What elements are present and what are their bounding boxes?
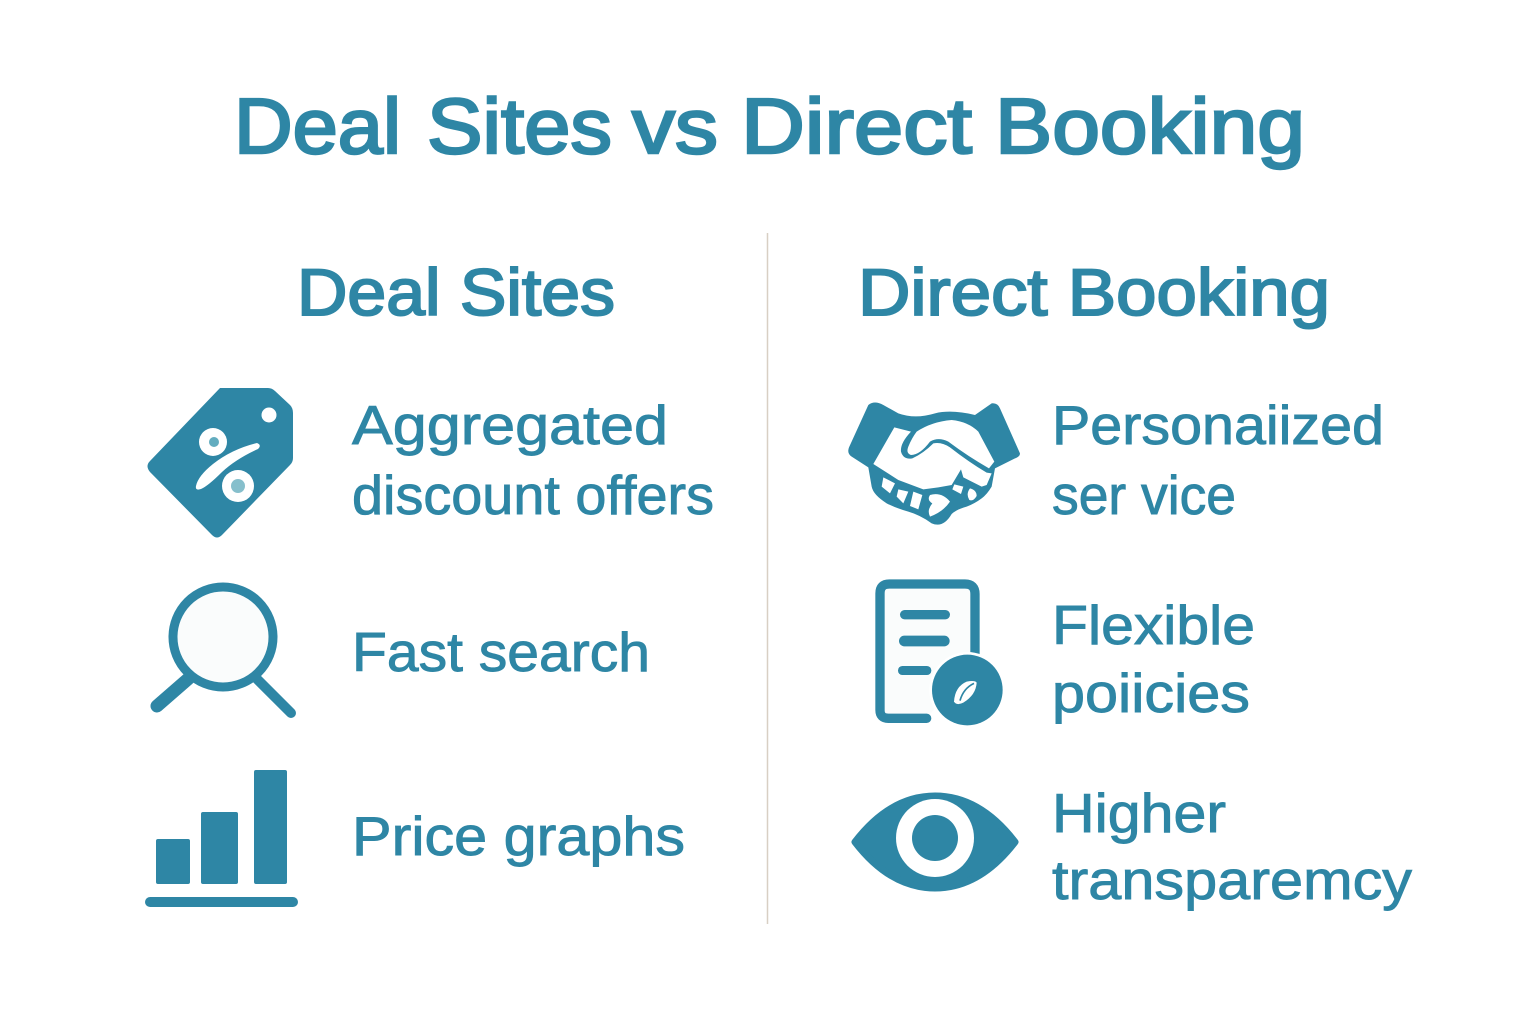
title: vs bbox=[632, 82, 718, 170]
text: personalized service: Personaiized bbox=[1052, 394, 1384, 456]
title bbox=[234, 82, 1305, 170]
text: price graphs: Price graphs bbox=[352, 805, 685, 867]
title: Booking bbox=[995, 82, 1305, 170]
icon: eye bbox=[855, 796, 1015, 888]
icon: discount tag bbox=[148, 388, 293, 538]
icon: bar chart bbox=[145, 770, 298, 907]
heading: direct booking: Direct Booking bbox=[858, 255, 1330, 329]
title: Deal bbox=[234, 82, 401, 170]
title: Direct bbox=[741, 82, 972, 170]
panel: direct booking bbox=[848, 255, 1413, 911]
text: flexible policies: poiicies bbox=[1052, 662, 1250, 724]
text: flexible policies: Flexible bbox=[1052, 594, 1255, 656]
text: higher transparency: transparemcy bbox=[1052, 849, 1413, 911]
text: fast search: Fast search bbox=[352, 621, 650, 683]
text: personalized service bbox=[1052, 394, 1384, 526]
panel: deal sites bbox=[145, 255, 714, 907]
text: higher transparency: Higher bbox=[1052, 782, 1226, 844]
text: aggregated discount offers: Aggregated bbox=[352, 394, 668, 456]
icon: policy document bbox=[880, 584, 1005, 728]
title: Sites bbox=[427, 82, 612, 170]
heading: deal sites: Deal Sites bbox=[297, 255, 615, 329]
icon: handshake bbox=[848, 402, 1020, 525]
text: aggregated discount offers: discount offers bbox=[352, 464, 714, 526]
text: aggregated discount offers bbox=[352, 394, 714, 526]
text: personalized service: ser vice bbox=[1052, 464, 1236, 526]
icon: magnifying glass bbox=[157, 587, 291, 713]
text: higher transparency bbox=[1052, 782, 1413, 911]
text: flexible policies bbox=[1052, 594, 1255, 724]
